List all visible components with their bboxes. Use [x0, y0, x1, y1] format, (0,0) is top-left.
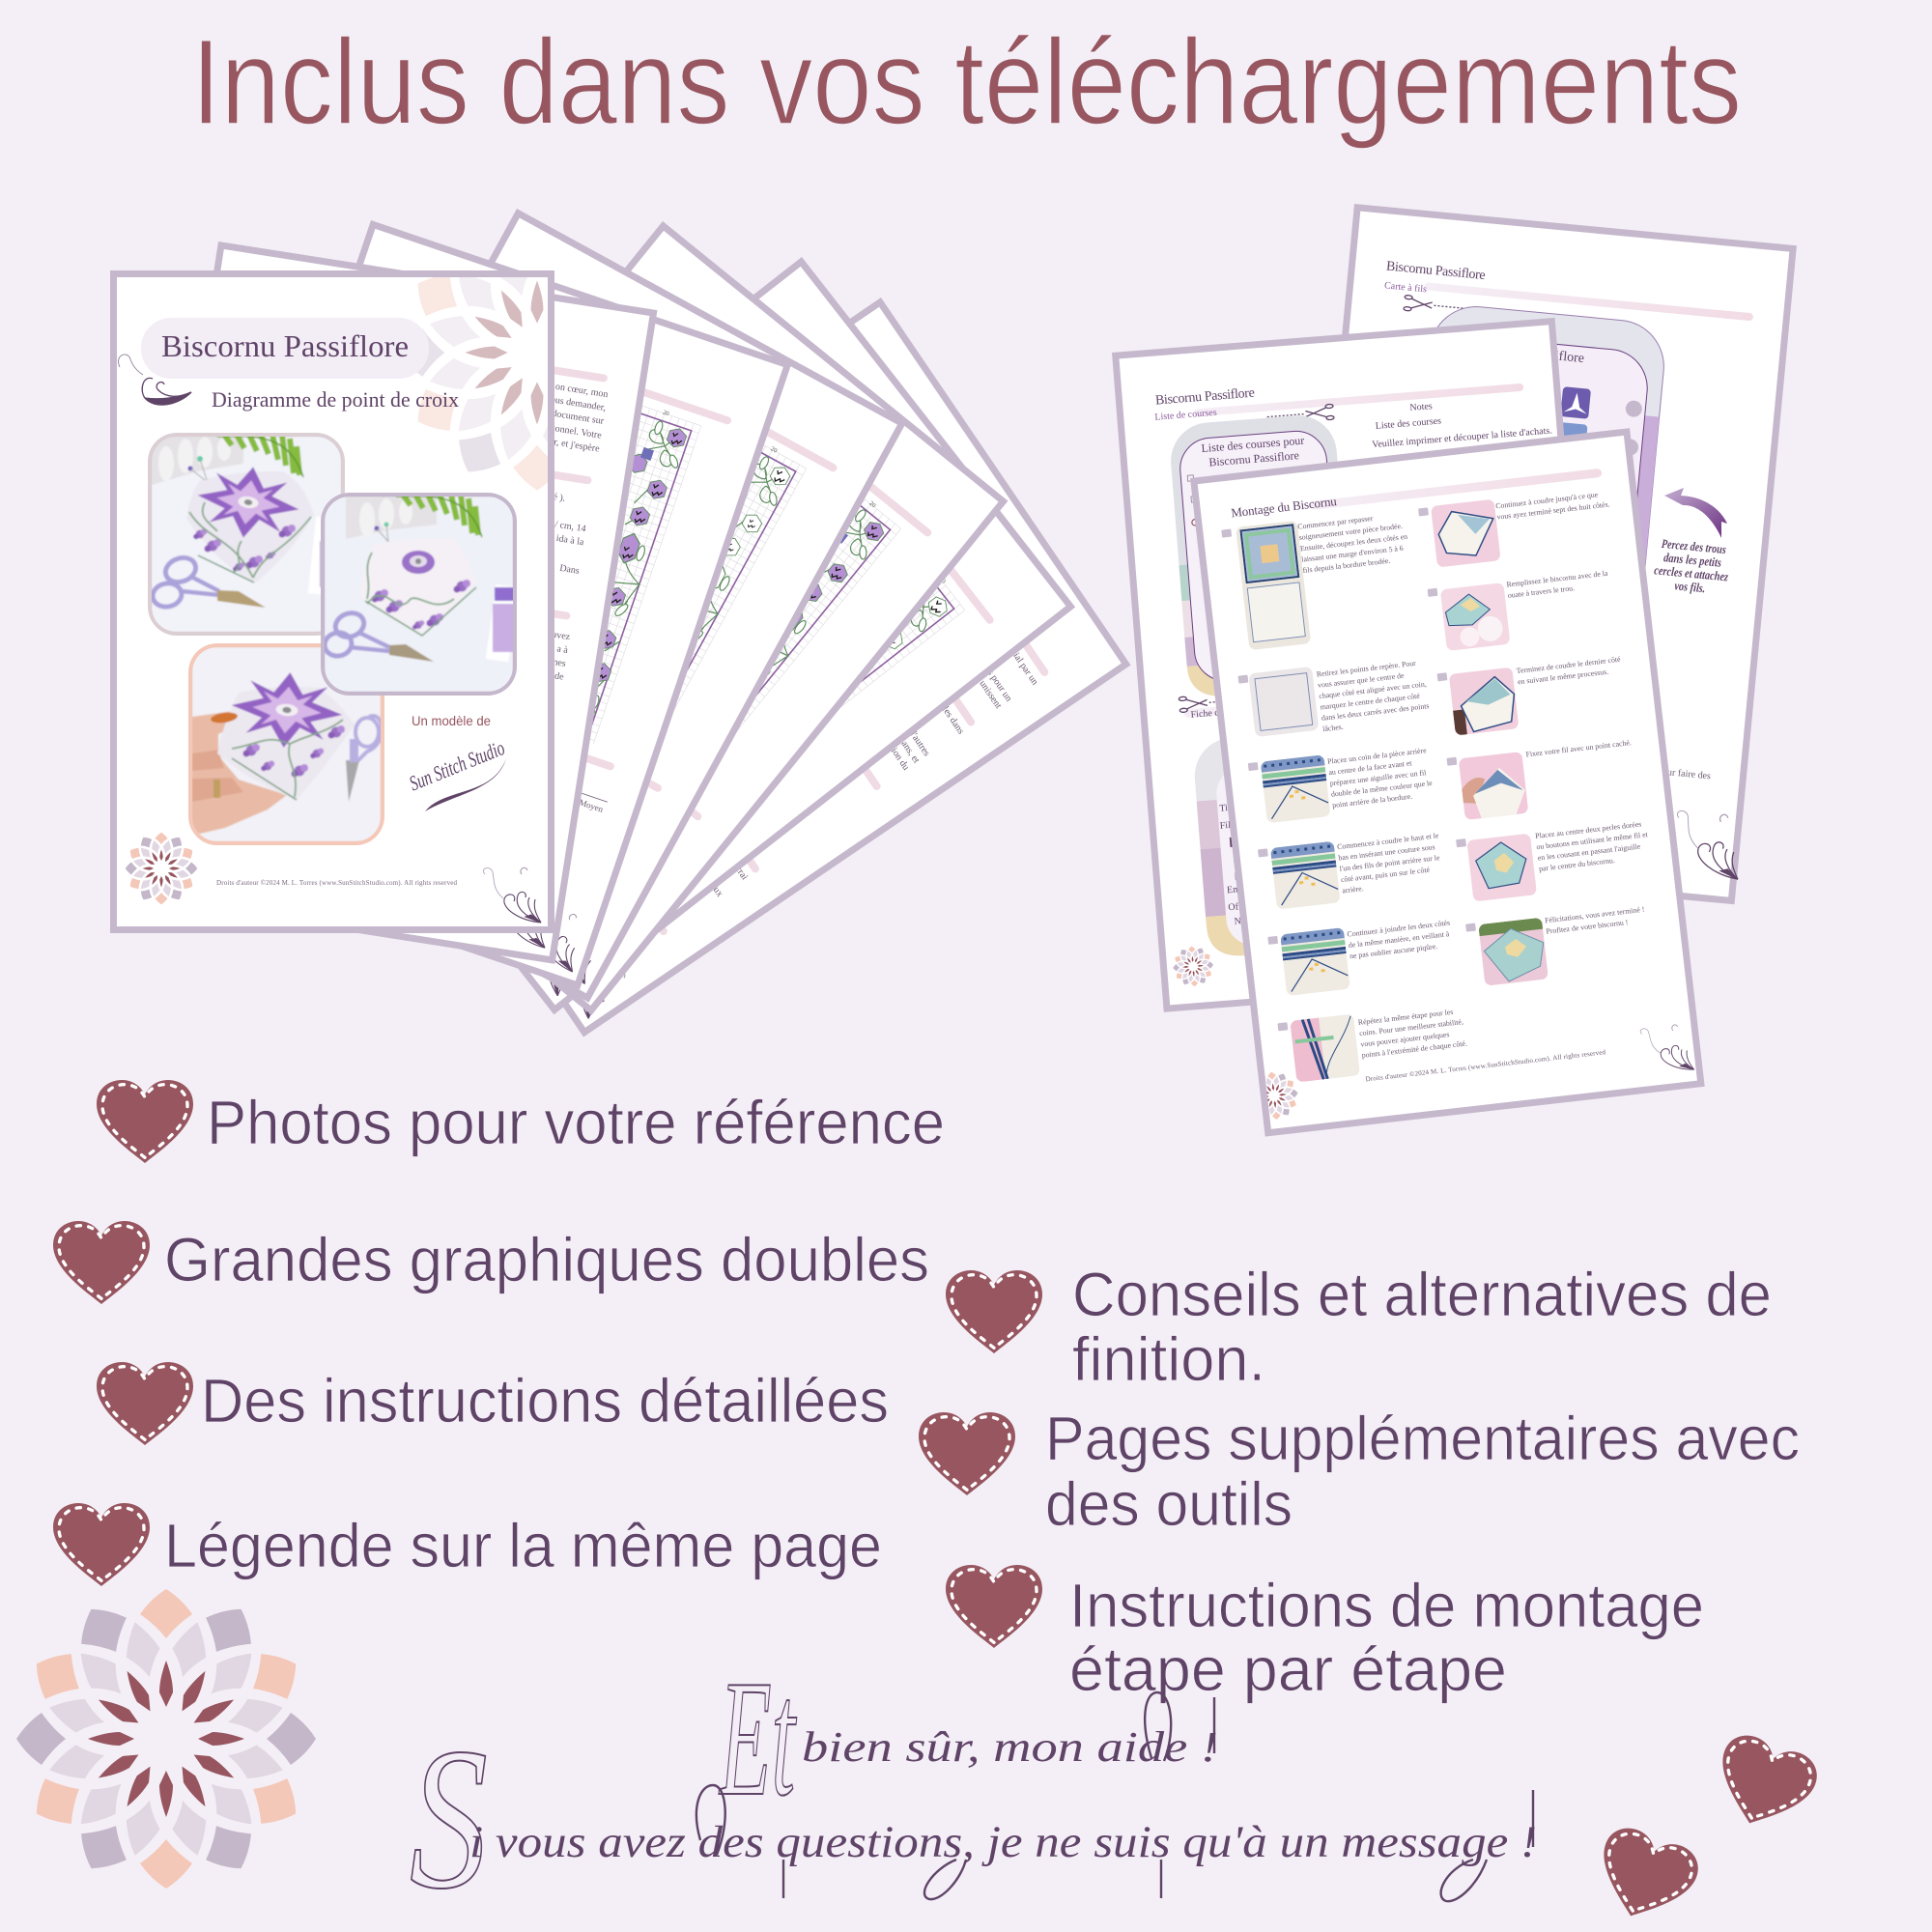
notes [1369, 392, 1552, 450]
script line 2: S [410, 1707, 488, 1931]
step texts: Répétez la même étape pour les [1357, 1008, 1454, 1027]
cover small mandala [126, 833, 197, 904]
scissors [1266, 404, 1334, 425]
feature: extra pages: des outils [1045, 1469, 1293, 1539]
page: chart page E [285, 262, 1070, 1009]
thread card photo: Biscornu Passiflore [1478, 342, 1585, 366]
page: chart page C [204, 213, 902, 998]
page: introduction text page A: / cm, 14 [554, 519, 586, 534]
step texts: points à l'extrémité de chaque côté. [1361, 1039, 1467, 1060]
handwritten note: cercles et attachez [1654, 562, 1730, 584]
page: chart page B: Moyen [578, 797, 605, 814]
page: cover [110, 270, 554, 933]
feature: assembly: étape par étape [1069, 1634, 1507, 1704]
script message [410, 1647, 1537, 1931]
feature: tips: Conseils et alternatives de [1072, 1260, 1772, 1329]
step 9 photo [1449, 668, 1520, 736]
step texts: chaque côté est aligné avec un coin, [1319, 680, 1427, 700]
heading: Biscornu Passiflore [1154, 386, 1255, 409]
subheading: Liste de courses [1154, 408, 1217, 423]
script line 2 [410, 1707, 1537, 1931]
step texts: marquez le centre de chaque côté [1320, 692, 1421, 711]
notes: Notes [1409, 401, 1433, 413]
project sheet card: Em [1227, 884, 1241, 895]
photo 3: biscornu in hand [188, 643, 384, 845]
step texts: Commencez à coudre le haut et le [1337, 831, 1439, 851]
page swirl [1640, 1023, 1694, 1075]
page: chart page B [163, 224, 787, 985]
page: text page with instructions: ial par un [1010, 651, 1040, 687]
thread card photo [1392, 302, 1668, 767]
step texts: Profitez de votre biscornu ! [1546, 918, 1629, 936]
truncated note: ur faire des [1667, 767, 1711, 781]
panel: shopping list page [1116, 322, 1604, 1009]
page: text page with instructions [338, 302, 1126, 1033]
large mandala [16, 1589, 316, 1889]
page: introduction text page A: a à [556, 643, 569, 656]
page: chart page D [251, 226, 1004, 1010]
step texts: lâches. [1322, 723, 1344, 733]
step texts: préparez une aiguille avec un fil [1329, 768, 1428, 787]
subheading: Carte à fils [1384, 280, 1427, 295]
page: introduction text page A: ida à la [555, 533, 585, 548]
project sheet card: Off [1228, 901, 1242, 913]
step texts: en les cousant en passant l'aiguille [1537, 841, 1641, 863]
step 5 photo [1280, 927, 1350, 996]
thread symbol purple [1560, 386, 1591, 419]
project sheet card: No [1234, 916, 1246, 927]
pink rule [1310, 469, 1603, 510]
handwritten note: vos fils. [1674, 578, 1706, 595]
heading: Montage du Biscornu [1230, 494, 1338, 520]
designer credit: Un modèle de [412, 713, 491, 728]
page: introduction text page A: ous demander, [550, 394, 607, 413]
cover subtitle: Diagramme de point de croix [212, 387, 459, 412]
step texts: Placez au centre deux perles dorées [1535, 819, 1642, 840]
step 7 photo [1431, 499, 1501, 568]
feature: tips: finition. [1072, 1324, 1265, 1394]
shopping list card [1168, 412, 1355, 699]
page: introduction text page A: on cœur, mon [554, 382, 609, 400]
page: introduction text page A: r, et j'espère [553, 437, 601, 455]
step 11 photo [1466, 834, 1537, 902]
small mandala [1172, 945, 1215, 988]
project sheet card: Fil [1219, 820, 1232, 832]
cover faded mandala [417, 277, 548, 491]
step texts: point arrière de la bordure. [1332, 792, 1413, 810]
feature: charts: Grandes graphiques doubles [164, 1225, 929, 1294]
feature: extra pages: Pages supplémentaires avec [1045, 1404, 1800, 1473]
step 4 photo [1270, 841, 1341, 910]
page: text page with instructions: ux [711, 885, 725, 899]
panel: assembly instructions page [1180, 432, 1701, 1134]
page: introduction text page A: de [554, 670, 565, 683]
page: text page with instructions: s ans, et [895, 734, 922, 765]
feature: photos: Photos pour votre référence [207, 1088, 945, 1157]
photo 1: biscornu with star [148, 433, 347, 636]
step texts: de la même manière, en veillant à [1348, 929, 1450, 950]
page: text page with instructions: i unissent [974, 674, 1004, 711]
pink rule [1194, 384, 1523, 416]
shopping list card: Biscornu Passiflore [1208, 448, 1299, 469]
step texts: Fixez votre fil avec un point caché. [1525, 738, 1632, 758]
step 10 photo [1459, 752, 1528, 820]
small mandala [1265, 1072, 1298, 1120]
cover title pill: Biscornu Passiflore [161, 328, 409, 363]
step texts: double de la même couleur que le [1330, 779, 1434, 799]
cover copyright: Droits d'auteur ©2024 M. L. Torres (www.SunStitchStudio.com). All rights reserved [216, 879, 458, 887]
feature: extra pages [919, 1404, 1800, 1539]
step texts: Continuez à coudre jusqu'à ce que [1495, 490, 1599, 510]
step texts: l'un des fils de point arrière sur le [1339, 853, 1440, 873]
step 2 photo [1248, 667, 1319, 737]
panel: fan of pattern pages [114, 213, 1126, 1033]
decorative heart 2 [1585, 1821, 1705, 1932]
script line 1: Et [718, 1647, 797, 1831]
handwritten note: dans les petits [1663, 550, 1722, 570]
project sheet card [1192, 727, 1375, 958]
step texts: vous ayez terminé sept des huit côtés. [1496, 499, 1610, 522]
page: introduction text page A: sonnel. Votre [551, 423, 603, 441]
page: introduction text page A: nes [553, 657, 567, 669]
project sheet card: Ti [1219, 803, 1229, 814]
cover corner swirl [483, 867, 541, 923]
step texts: Placez un coin de la pièce arrière [1327, 746, 1428, 766]
script line 1: bien sûr, mon aide ! [802, 1723, 1218, 1771]
list: right column features [919, 1260, 1800, 1704]
script line 2: i vous avez des questions, je ne suis qu'à un message ! [469, 1817, 1537, 1867]
feature: assembly [946, 1565, 1704, 1704]
step texts: en suivant le même processus. [1518, 668, 1609, 686]
step texts: arrière. [1342, 884, 1364, 895]
page: text page with instructions: s pour un [985, 668, 1014, 703]
notes: Liste des courses [1375, 415, 1441, 432]
page: introduction text page A: avez [552, 629, 571, 642]
feature: legend: Légende sur la même page [164, 1511, 882, 1580]
designer credit [406, 713, 508, 811]
step texts: fils depuis la bordure brodée. [1302, 556, 1391, 575]
step badges [1221, 506, 1485, 1031]
page: text page with instructions: crai [733, 865, 750, 882]
page: text page with instructions: ables dans [935, 697, 966, 736]
step texts: Remplissez le biscornu avec de la [1506, 569, 1608, 589]
shopping list card: Liste des courses pour [1201, 434, 1305, 455]
scissors [1404, 295, 1471, 317]
script line 1 [718, 1647, 1218, 1831]
step texts: Continuez à joindre les deux côtés [1347, 919, 1451, 939]
step 8 photo [1440, 582, 1511, 651]
step texts: bas en insérant une couture sous [1338, 842, 1435, 863]
copyright: Droits d'auteur ©2024 M. L. Torres (www.SunStitchStudio.com). All rights reserved [1365, 1048, 1606, 1083]
page swirl [1672, 810, 1744, 879]
page: introduction text page A: document sur [552, 409, 605, 427]
page: introduction text page A [120, 245, 653, 960]
page: introduction text page A: é ). [553, 492, 566, 504]
handwritten note [1652, 535, 1732, 597]
step texts: Retirez les points de repère. Pour [1316, 659, 1417, 678]
decorative heart 1 [1704, 1728, 1824, 1840]
list: left column features [53, 1080, 945, 1586]
step 6 photo [1290, 1013, 1360, 1083]
step texts: vous pouvez ajouter quelques [1360, 1030, 1450, 1049]
step texts: soigneusement votre pièce brodée. [1298, 522, 1403, 542]
feature: assembly: Instructions de montage [1069, 1571, 1704, 1640]
step texts: ouate à travers le trou. [1507, 583, 1575, 600]
step texts: Ensuite, découpez les deux côtés en [1299, 532, 1408, 553]
heading: Biscornu Passiflore [1385, 259, 1486, 283]
step texts: dans les deux carrés avec des points [1321, 701, 1430, 723]
step texts: vous assurer que le centre de [1318, 671, 1405, 690]
step texts: Félicitations, vous avez terminé ! [1545, 905, 1645, 924]
page: text page with instructions: tion du [887, 744, 911, 773]
step texts: laissant une marge d'environ 5 à 6 [1301, 544, 1404, 564]
title: Inclus dans vos téléchargements [191, 15, 1742, 150]
fiche label [1179, 690, 1271, 722]
handwritten note: Percez des trous [1661, 536, 1726, 556]
panel: thread card page [1295, 208, 1798, 901]
step texts: coins. Pour une meilleure stabilité, [1359, 1017, 1463, 1037]
step 1 photo [1236, 521, 1311, 650]
page: introduction text page A: Dans [559, 563, 581, 577]
arrow to thread card holes [1664, 488, 1727, 538]
designer credit: Sun Stitch Studio [406, 735, 508, 795]
step texts: Commencez par repasser [1297, 514, 1374, 531]
page: text page with instructions: d'autres [906, 727, 932, 758]
step texts: par le centre du biscornu. [1539, 856, 1615, 873]
cover swirl [119, 355, 191, 405]
step texts: au centre de la face avant et [1328, 758, 1413, 777]
photo 2: biscornu side view [321, 493, 519, 696]
step texts [1297, 487, 1670, 1060]
step texts: Terminez de coudre le dernier côté [1516, 655, 1621, 675]
notes: Veuillez imprimer et découper la liste d'achats. [1372, 426, 1552, 450]
step 12 photo [1478, 918, 1548, 986]
feature: tips [946, 1260, 1772, 1394]
feature: instructions: Des instructions détaillées [201, 1366, 889, 1435]
step texts: côté avant, puis un sur le côté [1341, 866, 1431, 884]
pink rule [1424, 282, 1753, 321]
cover title pill [141, 318, 429, 379]
step texts: ou boutons en utilisant le même fil et [1536, 830, 1649, 851]
step 3 photo [1261, 754, 1331, 823]
step texts: ne pas oublier aucune piqûre. [1350, 942, 1438, 960]
fiche label: Fiche de [1190, 707, 1225, 721]
